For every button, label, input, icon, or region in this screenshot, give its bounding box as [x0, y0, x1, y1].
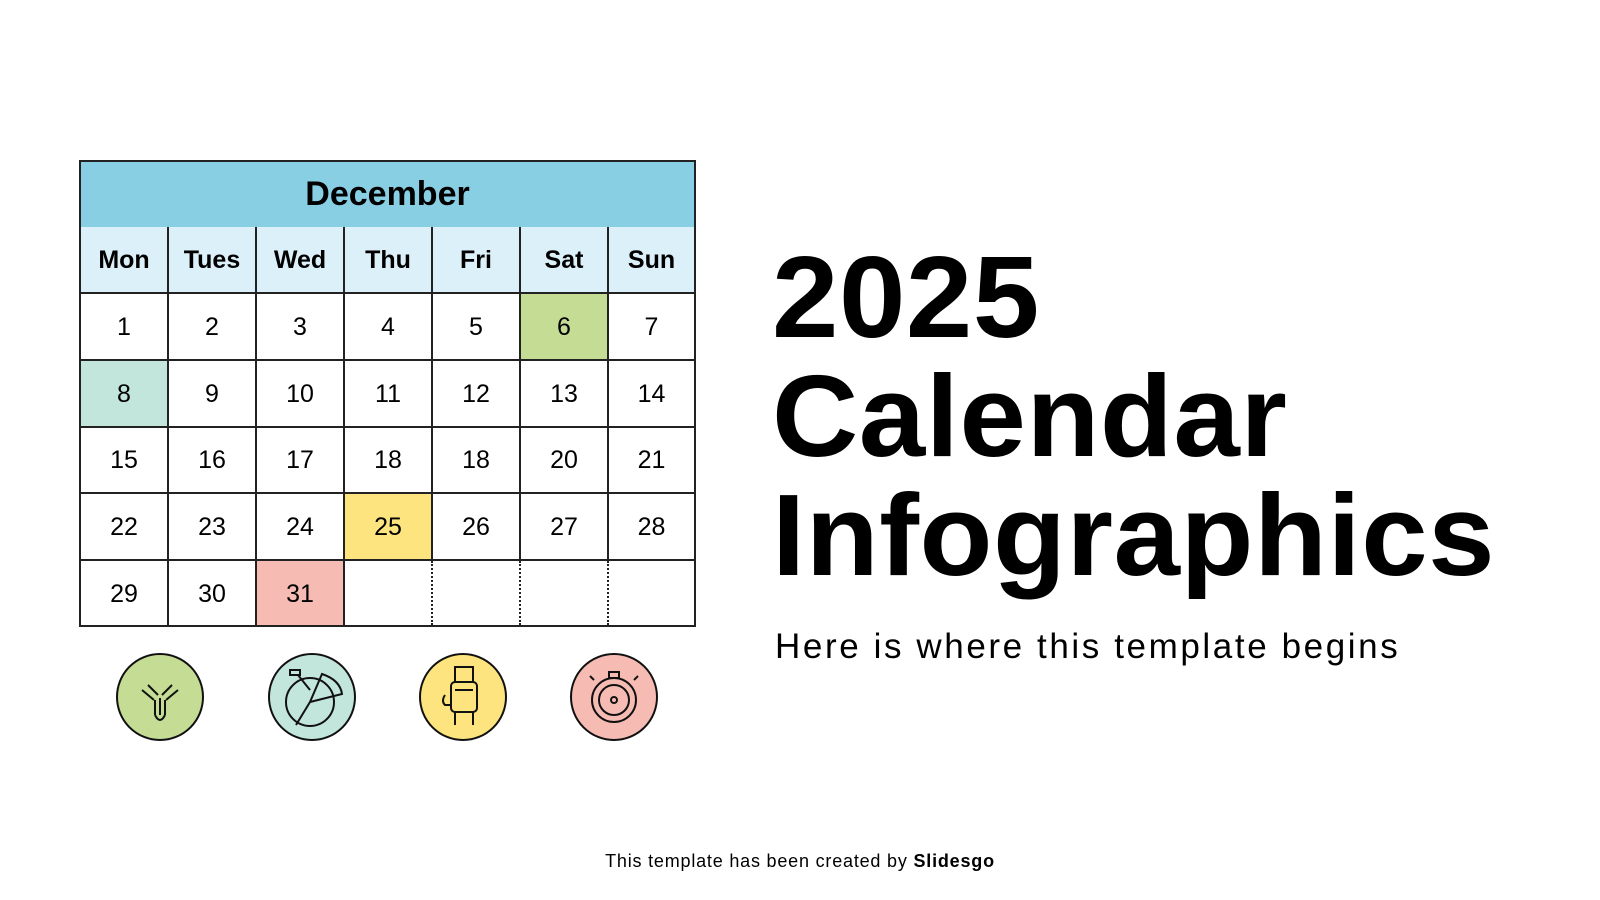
calendar: Wed: [274, 246, 326, 274]
calendar: 23: [198, 513, 226, 541]
calendar: 3: [293, 313, 307, 341]
calendar: 14: [638, 380, 665, 408]
title: Calendar: [772, 351, 1287, 481]
calendar: Tues: [184, 246, 240, 274]
calendar: 5: [469, 313, 483, 341]
calendar: 31: [286, 580, 314, 608]
calendar: 15: [110, 446, 138, 474]
calendar: 20: [550, 446, 578, 474]
icon: stopwatch: [571, 654, 657, 740]
icon: pie chart: [269, 654, 355, 740]
calendar: 12: [462, 380, 490, 408]
weekday row: [81, 227, 694, 294]
calendar: 17: [286, 446, 314, 474]
calendar: 8: [117, 380, 131, 408]
title: [772, 232, 1495, 600]
footer credit: This template has been created by Slidesgo: [605, 851, 995, 871]
calendar: 4: [381, 313, 395, 341]
calendar: 9: [205, 380, 219, 408]
calendar: Fri: [460, 246, 492, 274]
calendar: 26: [462, 513, 490, 541]
calendar: 11: [375, 380, 401, 408]
calendar: Sat: [545, 246, 583, 274]
calendar: 6: [557, 313, 571, 341]
calendar: [79, 160, 696, 627]
title: 2025: [772, 232, 1040, 362]
calendar: 30: [198, 580, 226, 608]
icon: hands: [117, 654, 203, 740]
calendar: 29: [110, 580, 138, 608]
calendar: 18: [462, 446, 490, 474]
calendar: 16: [198, 446, 226, 474]
calendar: 24: [286, 513, 314, 541]
calendar: Mon: [98, 246, 150, 274]
calendar: 18: [374, 446, 402, 474]
calendar: 2: [205, 313, 219, 341]
day grid: [81, 294, 694, 625]
calendar: Sun: [628, 246, 675, 274]
calendar: Thu: [365, 246, 411, 274]
calendar: 28: [638, 513, 665, 541]
calendar: 21: [638, 446, 665, 474]
calendar: 1: [117, 313, 131, 341]
month header: December: [305, 175, 470, 213]
month header: [81, 162, 694, 229]
calendar: 22: [110, 513, 138, 541]
calendar: 7: [645, 313, 658, 341]
calendar: 27: [550, 513, 578, 541]
icons row: [116, 653, 658, 741]
calendar: 10: [286, 380, 314, 408]
calendar: 13: [550, 380, 578, 408]
subtitle: Here is where this template begins: [775, 627, 1400, 666]
icon: smartwatch: [420, 654, 506, 740]
title: Infographics: [772, 470, 1495, 600]
calendar: 25: [374, 513, 402, 541]
